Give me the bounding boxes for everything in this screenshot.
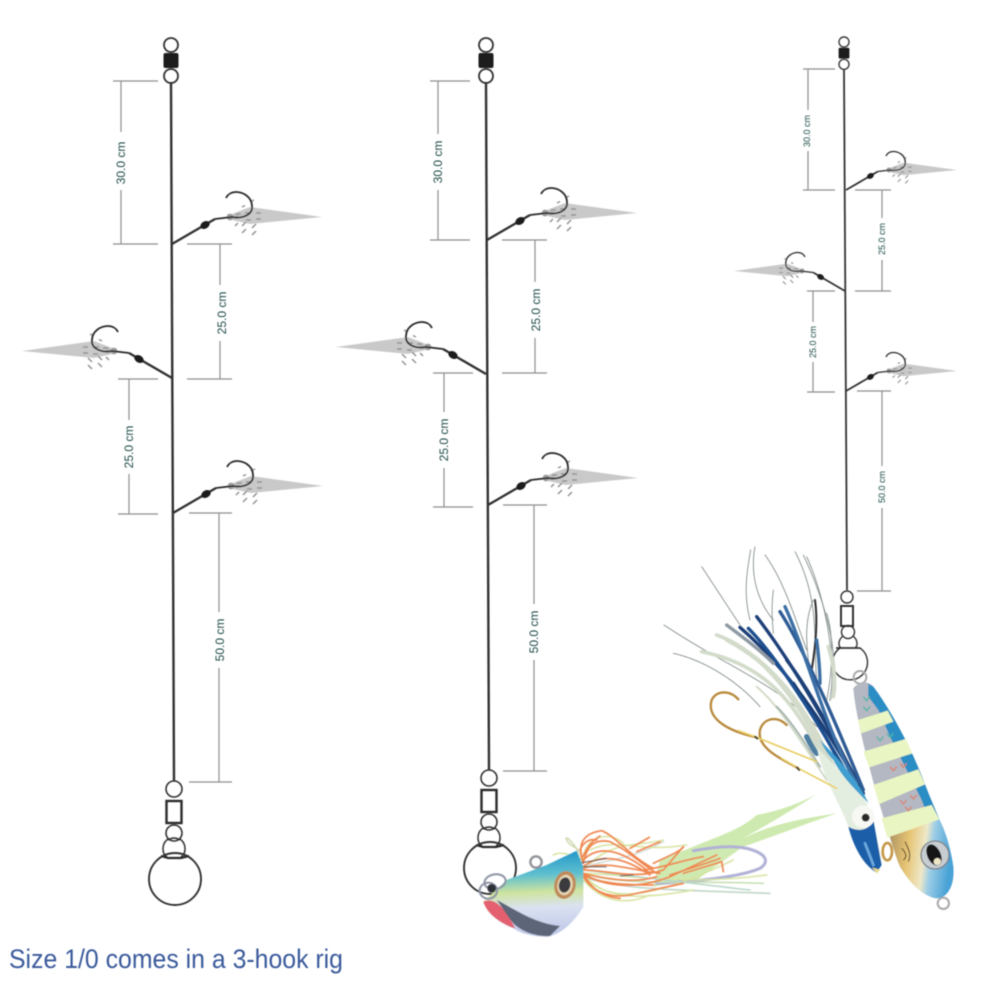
rig 2 dimension 25 cm left bbox=[433, 373, 473, 507]
rig 3 dimension 25 cm right bbox=[855, 190, 891, 291]
rig 1 hook middle left bbox=[22, 326, 172, 378]
rig 1 dimension 25 cm right: 25.0 cm bbox=[215, 292, 229, 334]
rig 3 bbox=[734, 37, 957, 680]
rig 1 top swivel bbox=[164, 38, 178, 83]
rig 3 dimension 50 cm bbox=[857, 391, 891, 591]
rig 1 bottom swivel and ring bbox=[149, 781, 201, 905]
rig 3 main line bbox=[844, 69, 847, 590]
rig 2 main line bbox=[486, 82, 489, 770]
caption: Size 1/0 comes in a 3-hook rig bbox=[9, 944, 343, 974]
dark collar threads bbox=[578, 858, 633, 876]
lure eye bbox=[852, 805, 875, 828]
rig 3 top swivel bbox=[839, 37, 849, 69]
rig 1 hook upper right bbox=[172, 192, 322, 244]
rig 1 dimension 25 cm left: 25.0 cm bbox=[122, 426, 136, 468]
pale skirt strands bbox=[553, 837, 770, 901]
rig 3 hook lower right bbox=[846, 353, 957, 391]
rig 2 dimension 50 cm: 50.0 cm bbox=[527, 611, 541, 653]
metal jig lure bbox=[853, 671, 954, 909]
rig 3 dimension 30 cm: 30.0 cm bbox=[802, 115, 812, 147]
rig 2 hook upper right bbox=[487, 188, 637, 240]
octopus skirt lure bbox=[664, 547, 882, 873]
head eye bbox=[552, 869, 578, 901]
jig script logo bbox=[902, 842, 910, 862]
rig 2 bottom swivel and ring bbox=[464, 770, 516, 894]
rig 2 dimension 25 cm right bbox=[502, 240, 547, 373]
rig 2 dimension 25 cm left: 25.0 cm bbox=[437, 419, 451, 461]
rig 2 hook lower right bbox=[488, 453, 638, 505]
rig 1 dimension 25 cm right bbox=[187, 244, 232, 379]
rig 3 dimension 30 cm bbox=[802, 69, 835, 190]
jig tail and nose rings bbox=[854, 671, 866, 684]
jig eye bbox=[921, 841, 949, 869]
holographic scale marks bbox=[863, 697, 917, 811]
jig head bbox=[888, 819, 954, 898]
head body bbox=[483, 851, 583, 937]
split ring bbox=[883, 843, 892, 860]
lavender hook bbox=[657, 847, 765, 883]
head belly pink bbox=[483, 900, 515, 928]
rig 1 dimension 50 cm bbox=[189, 513, 232, 782]
rig 2 dimension 25 cm right: 25.0 cm bbox=[529, 289, 543, 331]
nose rings bbox=[480, 873, 507, 899]
rig 2 top swivel bbox=[478, 38, 494, 83]
gold double hook bbox=[711, 692, 837, 788]
green squid tentacles bbox=[653, 794, 837, 887]
orange skirt strands bbox=[580, 831, 723, 898]
rig 1 dimension 30 cm: 30.0 cm bbox=[114, 142, 128, 184]
rig 3 dimension 25 cm right: 25.0 cm bbox=[877, 223, 887, 255]
rig 2 dimension 30 cm bbox=[430, 81, 470, 240]
rig 3 dimension 25 cm left: 25.0 cm bbox=[808, 326, 818, 358]
head dark band bbox=[497, 900, 560, 936]
rig 3 dimension 50 cm: 50.0 cm bbox=[877, 471, 887, 503]
rig 1 hook lower right bbox=[173, 461, 323, 513]
rig 3 hook upper right bbox=[846, 152, 957, 190]
rig 2 hook middle left bbox=[336, 322, 486, 374]
rig 2 dimension 50 cm bbox=[503, 505, 547, 771]
rig 3 hook middle left bbox=[734, 253, 845, 291]
rig 2 dimension 30 cm: 30.0 cm bbox=[431, 141, 445, 183]
rig 1 dimension 50 cm: 50.0 cm bbox=[213, 619, 227, 661]
rig 1 dimension 25 cm left bbox=[118, 379, 158, 514]
rig 3 dimension 25 cm left bbox=[807, 291, 835, 392]
silver tinsel strands bbox=[664, 547, 834, 727]
glow bands bbox=[858, 711, 939, 838]
jig blue back bbox=[868, 684, 947, 840]
blue strands bbox=[727, 607, 863, 797]
jig head lure bbox=[480, 831, 770, 937]
rig 1 bbox=[22, 38, 323, 905]
rig 3 bottom swivel and ring bbox=[832, 591, 867, 680]
pale strands bbox=[702, 635, 840, 780]
lure body bbox=[817, 747, 882, 872]
rig 2 bbox=[336, 38, 638, 894]
jig body bbox=[853, 682, 954, 898]
rig 1 dimension 30 cm bbox=[113, 81, 158, 244]
rig 1 main line bbox=[171, 82, 174, 781]
top eyelet bbox=[530, 856, 542, 868]
